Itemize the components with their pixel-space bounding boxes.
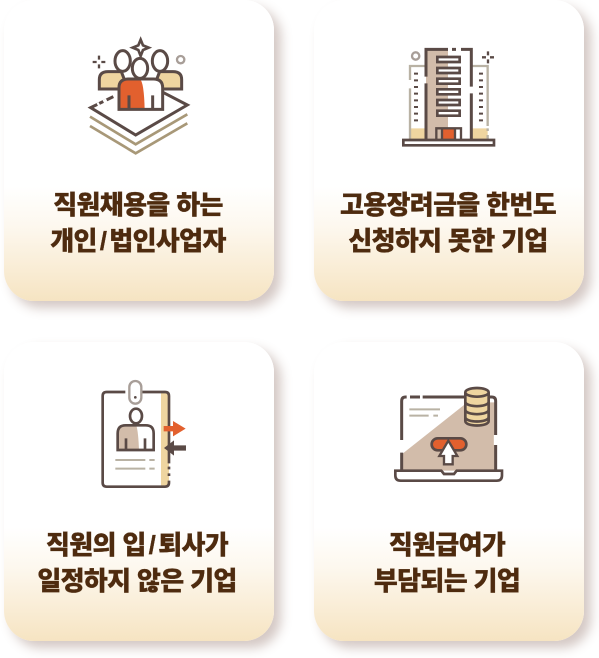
heading: employment subsidy — [340, 190, 556, 256]
panel: payroll burden — [314, 342, 584, 641]
heading: employee hiring: 직원채용을 하는 — [53, 190, 223, 220]
heading: payroll burden: 부담되는 기업 — [374, 566, 520, 596]
heading: staff turnover: 직원의 입/퇴사가 — [46, 530, 228, 560]
panel: employment subsidy — [314, 0, 584, 301]
icon: office building — [402, 48, 496, 147]
heading: employee hiring: 개인/법인사업자 — [50, 226, 226, 256]
icon: ID card with in and out arrows — [101, 380, 186, 488]
heading: employment subsidy: 고용장려금을 한번도 — [340, 190, 556, 220]
panel: staff turnover — [4, 342, 274, 641]
heading: staff turnover — [37, 530, 237, 596]
heading: payroll burden — [374, 530, 520, 596]
heading: payroll burden: 직원급여가 — [389, 530, 505, 560]
icon: people on stacked papers — [88, 36, 190, 155]
heading: employee hiring — [50, 190, 226, 256]
heading: employment subsidy: 신청하지 못한 기업 — [348, 226, 548, 256]
panel: employee hiring — [4, 0, 274, 301]
heading: staff turnover: 일정하지 않은 기업 — [37, 566, 237, 596]
icon: laptop with coins — [394, 386, 504, 482]
